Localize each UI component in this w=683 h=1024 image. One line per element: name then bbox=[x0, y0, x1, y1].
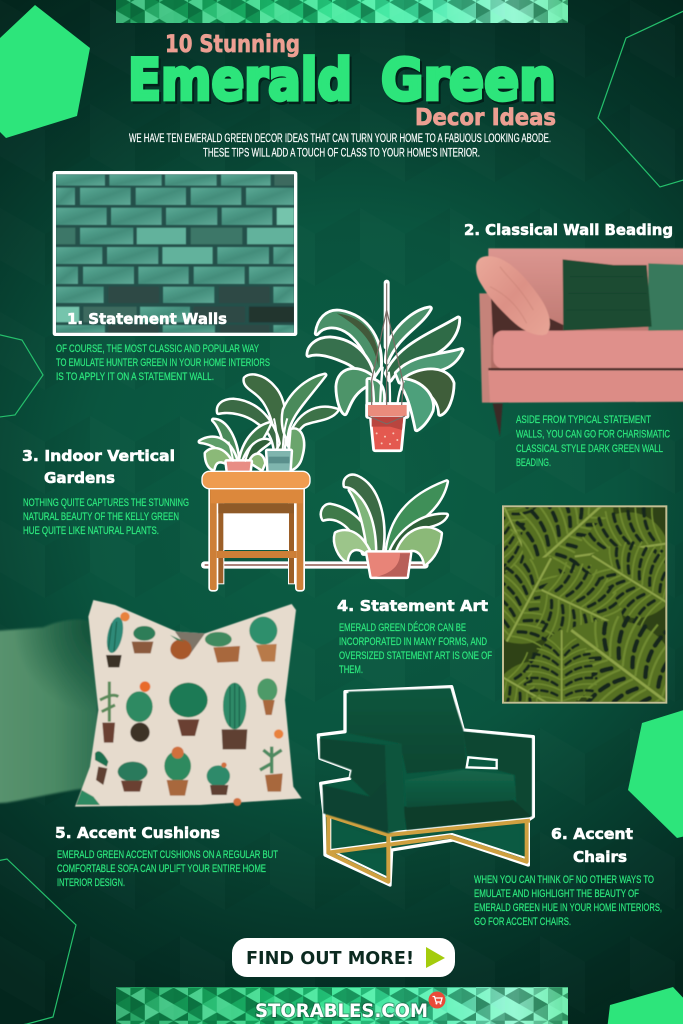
body text: THEM. bbox=[339, 664, 363, 676]
gold base bbox=[326, 812, 532, 882]
body text bbox=[474, 874, 662, 928]
body text: EMERALD GREEN DÉCOR CAN BE bbox=[339, 621, 466, 634]
title: Emerald bbox=[130, 50, 354, 116]
hanging plant bbox=[308, 283, 462, 449]
panel: 5 accent cushions bbox=[55, 824, 278, 889]
panel: 2 classical wall beading bbox=[464, 221, 683, 469]
heading bbox=[551, 825, 634, 866]
hexagon: top left solid bbox=[0, 5, 90, 138]
body text: INTERIOR DESIGN. bbox=[57, 877, 125, 889]
heading: 4. Statement Art bbox=[337, 597, 489, 615]
cushions photo bbox=[0, 600, 302, 807]
body text bbox=[23, 497, 189, 537]
body text: EMERALD GREEN ACCENT CUSHIONS ON A REGULAR BUT bbox=[57, 849, 278, 861]
pink sofa photo bbox=[476, 248, 683, 437]
body text bbox=[516, 414, 670, 469]
hexagon: mid left outline bbox=[0, 333, 43, 418]
body text bbox=[56, 343, 270, 383]
arm opening bbox=[467, 757, 497, 768]
hexagon: top right outline bbox=[598, 8, 683, 187]
body text: INCORPORATED IN MANY FORMS, AND bbox=[339, 636, 487, 648]
patterned cactus cushion bbox=[75, 600, 302, 807]
body text: HUE QUITE LIKE NATURAL PLANTS. bbox=[23, 525, 159, 537]
heading: 5. Accent Cushions bbox=[55, 824, 220, 842]
body text: BEADING. bbox=[516, 457, 551, 469]
button: find out more: FIND OUT MORE! bbox=[246, 948, 414, 969]
body text: OVERSIZED STATEMENT ART IS ONE OF bbox=[339, 650, 492, 662]
heading: Gardens bbox=[44, 469, 115, 487]
heading: 2. Classical Wall Beading bbox=[464, 221, 673, 239]
table plants bbox=[200, 375, 337, 472]
body text: NATURAL BEAUTY OF THE KELLY GREEN bbox=[23, 511, 179, 523]
brand name: STORABLES.COM bbox=[255, 1000, 428, 1022]
heading bbox=[22, 447, 175, 487]
body text: IS TO APPLY IT ON A STATEMENT WALL. bbox=[56, 371, 214, 383]
table bbox=[203, 472, 309, 590]
monstera leaf art bbox=[502, 505, 668, 704]
panel: 3 indoor vertical gardens bbox=[22, 447, 189, 537]
panel: 6 accent chairs bbox=[474, 825, 662, 928]
button: find out more bbox=[232, 938, 455, 977]
heading: 6. Accent bbox=[551, 825, 634, 843]
title: Green bbox=[381, 48, 556, 114]
panel: 1 statement walls bbox=[53, 171, 297, 383]
hexagon: bottom left outline bbox=[0, 859, 76, 1024]
body text: COMFORTABLE SOFA CAN UPLIFT YOUR ENTIRE HOME bbox=[57, 863, 266, 875]
title: Emerald bbox=[128, 48, 352, 114]
brick wall photo bbox=[53, 171, 297, 336]
green velvet cushion bbox=[0, 620, 98, 804]
heading: Chairs bbox=[573, 848, 627, 866]
illustration: potted plants and table bbox=[200, 283, 462, 590]
shelf line bbox=[205, 554, 425, 576]
title bbox=[128, 30, 558, 131]
intro text bbox=[129, 133, 551, 160]
hexagon: right solid bbox=[628, 708, 683, 838]
top mosaic banner bbox=[116, 0, 568, 23]
footer mosaic banner bbox=[116, 987, 568, 1024]
floor plant bbox=[322, 476, 447, 577]
panel: 4 statement art bbox=[337, 505, 668, 704]
body text bbox=[339, 621, 492, 676]
title: 10 Stunning bbox=[165, 30, 300, 58]
title: Green bbox=[383, 50, 558, 116]
icon: play arrow bbox=[426, 947, 445, 968]
body text: OF COURSE, THE MOST CLASSIC AND POPULAR WAY bbox=[56, 343, 259, 355]
chair body bbox=[320, 688, 532, 833]
intro text: THESE TIPS WILL ADD A TOUCH OF CLASS TO YOUR HOME'S INTERIOR. bbox=[203, 148, 480, 160]
heading: 3. Indoor Vertical bbox=[22, 447, 175, 465]
chair outline bbox=[318, 687, 533, 885]
title: Decor Ideas bbox=[415, 105, 556, 131]
body text: TO EMULATE HUNTER GREEN IN YOUR HOME INTERIORS bbox=[56, 357, 270, 369]
hexagon: bottom right solid bbox=[607, 987, 683, 1024]
armchair bbox=[318, 687, 533, 885]
body text: GO FOR ACCENT CHAIRS. bbox=[474, 916, 571, 928]
body text bbox=[57, 849, 278, 889]
body text: NOTHING QUITE CAPTURES THE STUNNING bbox=[23, 497, 189, 509]
icon: shopping cart badge bbox=[428, 992, 446, 1008]
heading: 1. Statement Walls bbox=[67, 310, 227, 328]
